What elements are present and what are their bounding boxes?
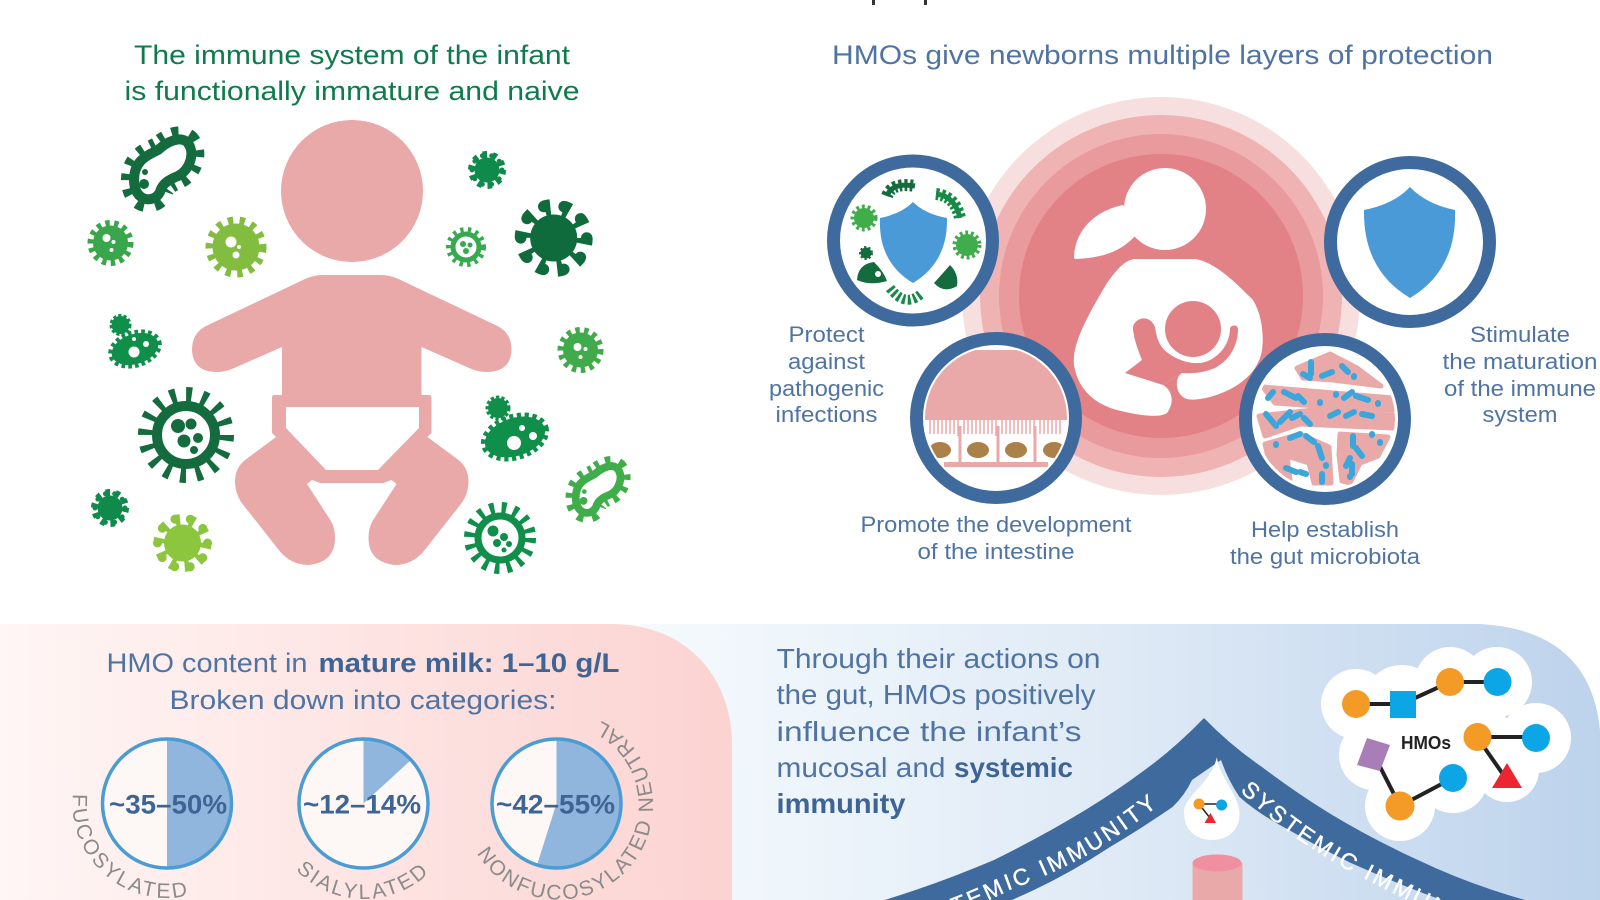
- label: protect against pathogenic infections: infections: [776, 402, 878, 427]
- label: help establish: [1230, 517, 1421, 569]
- label: protect against pathogenic infections: pathogenic: [769, 376, 884, 401]
- curved label: nonfucosylated neutral: NONFUCOSYLATED NEUTRAL: [478, 721, 654, 900]
- baby in arms: [1125, 301, 1238, 385]
- pie: sialylated: [299, 739, 428, 868]
- text: actions on the gut: Through their actions on: [776, 643, 1100, 674]
- concentric circles behind mother: [962, 97, 1360, 495]
- germ: right spiky: [562, 332, 598, 368]
- germ: medium ring virus: [471, 509, 529, 567]
- text: HMO content heading: HMO content in: [106, 648, 308, 678]
- cut-off top heading descenders: [872, 0, 927, 5]
- label: protect against pathogenic infections: Protect: [788, 322, 864, 347]
- pie: sialylated: ~12–14%: [303, 790, 421, 820]
- cylinder: gut tube: [1192, 854, 1242, 900]
- germ: small ring virus: [450, 231, 482, 263]
- circle: intestine: [916, 338, 1076, 498]
- label: stimulate maturation: [1442, 322, 1598, 427]
- group: pathogens: [92, 139, 620, 568]
- pie: nonfucosylated neutral: [492, 739, 621, 868]
- label: HMOs: HMOs: [1401, 733, 1451, 753]
- small germs around shield: [854, 185, 978, 300]
- pie: fucosylated: [102, 739, 232, 868]
- text: HMO content heading: Broken down into categories:: [170, 685, 556, 715]
- label: promote development: [860, 512, 1132, 564]
- text: actions on the gut: systemic: [954, 752, 1073, 783]
- intestinal lining illustration: [920, 350, 1070, 467]
- label: protect against pathogenic infections: against: [788, 349, 865, 374]
- icon: milk drop with HMO: [1184, 757, 1240, 840]
- panel: HMO content: [0, 624, 732, 900]
- germ: small green spiky: [92, 225, 128, 261]
- germ: green bean bacterium: [576, 466, 620, 513]
- germ: small splat top right: [472, 155, 502, 185]
- text: actions on the gut: mucosal and: [776, 752, 946, 783]
- germ: dark bean bacterium: [134, 139, 191, 199]
- label: help establish: the gut microbiota: [1230, 544, 1421, 569]
- gut microbiota illustration: [1259, 354, 1393, 483]
- text: actions on the gut: immunity: [776, 788, 906, 819]
- text: HMO content heading: [106, 648, 620, 715]
- germ: large dark splat: [521, 205, 587, 271]
- heading: immature immune system: The immune system of the infant: [134, 40, 571, 70]
- germ: large ring virus: [147, 396, 225, 474]
- label: promote development: Promote the development: [860, 512, 1132, 537]
- icon: baby silhouette: [192, 120, 512, 565]
- heading: layers of protection: HMOs give newborns multiple layers of protection: [832, 40, 1493, 70]
- curved label: fucosylated: FUCOSYLATED: [72, 796, 186, 898]
- germ: bacillus blob right: [480, 398, 550, 465]
- cloud: HMO molecules: [1321, 647, 1571, 841]
- text: actions on the gut: the gut, HMOs positively: [776, 679, 1096, 710]
- pie: nonfucosylated neutral: ~42–55%: [496, 790, 615, 820]
- label: stimulate maturation: system: [1482, 402, 1558, 427]
- label: promote development: of the intestine: [918, 539, 1074, 564]
- icon: shield: [1364, 187, 1455, 298]
- label: help establish: Help establish: [1251, 517, 1399, 542]
- germ: small splat bottom left: [95, 493, 125, 523]
- icon: mother and baby: [1074, 168, 1263, 416]
- circle: gut microbiota: [1246, 340, 1404, 498]
- circle: protect against infections: [834, 161, 992, 320]
- heading: immature immune system: is functionally immature and naive: [124, 76, 580, 106]
- label: stimulate maturation: Stimulate: [1470, 322, 1570, 347]
- label: stimulate maturation: the maturation: [1442, 349, 1598, 374]
- roof: systemic immunity band: [878, 718, 1532, 900]
- germ: lime spiky: [211, 222, 261, 272]
- germ: bacillus blob left: [108, 316, 162, 371]
- text: actions on the gut: [776, 643, 1100, 819]
- label: stimulate maturation: of the immune: [1444, 376, 1596, 401]
- pie: fucosylated: ~35–50%: [109, 790, 227, 820]
- label: protect against pathogenic infections: [769, 322, 884, 427]
- text: actions on the gut: influence the infant’s: [776, 716, 1082, 747]
- circle: maturation shield: [1330, 162, 1490, 322]
- icon: shield: [880, 202, 947, 283]
- heading: immature immune system: [124, 40, 580, 106]
- germ: lime splat: [158, 518, 208, 568]
- text: HMO content heading: mature milk: 1–10 g/L: [318, 648, 620, 678]
